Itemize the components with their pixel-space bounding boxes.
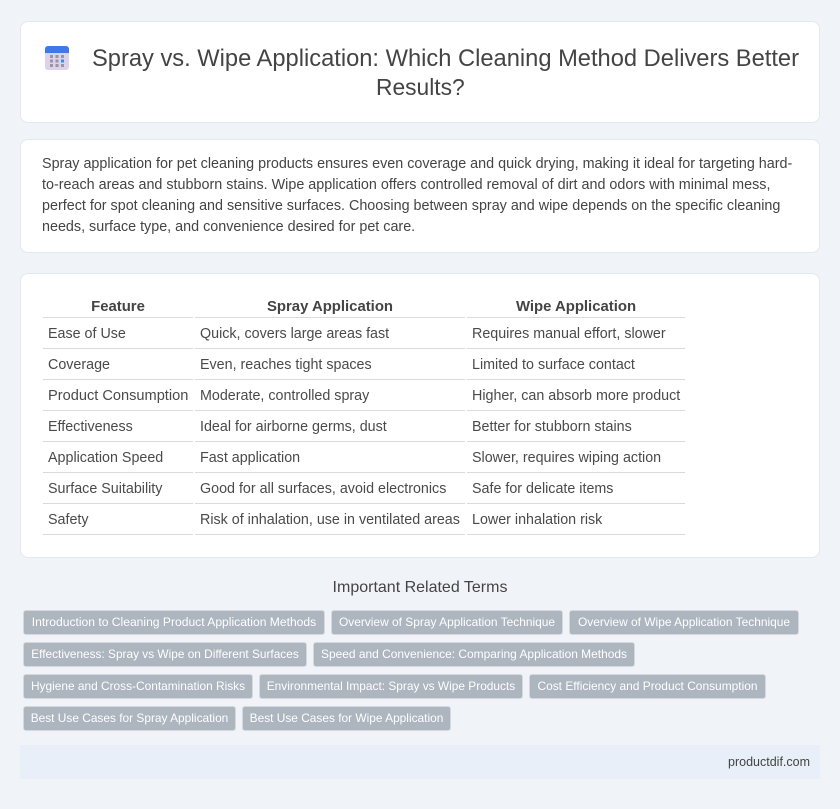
row: ease of use bbox=[48, 326, 666, 342]
row: application speed: Slower, requires wiping action bbox=[472, 450, 661, 466]
row: effectiveness bbox=[48, 419, 632, 435]
tag bbox=[259, 674, 523, 699]
footer text: productdif.com bbox=[728, 755, 810, 769]
row: coverage bbox=[48, 357, 635, 373]
row: coverage: Limited to surface contact bbox=[472, 357, 635, 373]
tag bbox=[23, 642, 307, 667]
row: safety: Safety bbox=[48, 512, 89, 528]
row: safety: Risk of inhalation, use in ventilated areas bbox=[200, 512, 460, 528]
row: surface suitability bbox=[48, 481, 613, 497]
tag: Overview of Wipe Application Technique bbox=[578, 615, 790, 629]
footer bar bbox=[20, 745, 820, 779]
panel: intro card bbox=[20, 139, 820, 253]
tag: Speed and Convenience: Comparing Application Methods bbox=[321, 647, 627, 661]
row: coverage: Even, reaches tight spaces bbox=[200, 357, 372, 373]
row: ease of use: Ease of Use bbox=[48, 326, 126, 342]
row: ease of use: Quick, covers large areas fast bbox=[200, 326, 389, 342]
row: effectiveness: Ideal for airborne germs, dust bbox=[200, 419, 387, 435]
tag: Overview of Spray Application Technique bbox=[339, 615, 555, 629]
text block: intro: perfect for spot cleaning and sensitive surfaces. Choosing between spray and wipe depends on the specific cleaning bbox=[42, 198, 780, 214]
row: product consumption: Product Consumption bbox=[48, 388, 188, 404]
heading: related terms: Important Related Terms bbox=[333, 579, 507, 596]
row: surface suitability: Safe for delicate items bbox=[472, 481, 613, 497]
row: application speed: Application Speed bbox=[48, 450, 163, 466]
tag: Best Use Cases for Spray Application bbox=[31, 711, 228, 725]
row: effectiveness: Better for stubborn stains bbox=[472, 419, 632, 435]
row: application speed bbox=[48, 450, 661, 466]
column headers: Feature bbox=[91, 299, 145, 315]
heading: line 1: Spray vs. Wipe Application: Which Cleaning Method Delivers Better bbox=[92, 46, 799, 72]
tag: Hygiene and Cross-Contamination Risks bbox=[31, 679, 245, 693]
row: product consumption bbox=[48, 388, 680, 404]
row: safety bbox=[48, 512, 602, 528]
column headers bbox=[91, 299, 636, 315]
row: product consumption: Higher, can absorb more product bbox=[472, 388, 680, 404]
row: safety: Lower inhalation risk bbox=[472, 512, 602, 528]
tag bbox=[569, 610, 799, 635]
row: application speed: Fast application bbox=[200, 450, 300, 466]
tag bbox=[331, 610, 563, 635]
panel: comparison table card bbox=[20, 273, 820, 558]
tag bbox=[529, 674, 766, 699]
tag: Environmental Impact: Spray vs Wipe Products bbox=[267, 679, 515, 693]
icon: calendar bbox=[45, 46, 69, 70]
tag bbox=[23, 674, 253, 699]
text block: intro: needs, surface type, and convenience desired for pet care. bbox=[42, 219, 415, 235]
row: surface suitability: Surface Suitability bbox=[48, 481, 162, 497]
row: effectiveness: Effectiveness bbox=[48, 419, 133, 435]
tag bbox=[313, 642, 635, 667]
tags: related terms bbox=[23, 610, 799, 731]
tag: Cost Efficiency and Product Consumption bbox=[537, 679, 758, 693]
tag: Introduction to Cleaning Product Application Methods bbox=[32, 615, 316, 629]
text block: intro: Spray application for pet cleaning products ensures even coverage and quick drying, making it ideal for targeting hard- bbox=[42, 156, 792, 172]
text block: intro bbox=[42, 156, 792, 235]
tag bbox=[23, 706, 236, 731]
table: comparison bbox=[43, 299, 685, 535]
tag: Effectiveness: Spray vs Wipe on Different Surfaces bbox=[31, 647, 299, 661]
row: surface suitability: Good for all surfaces, avoid electronics bbox=[200, 481, 446, 497]
text block: intro: to-reach areas and stubborn stains. Wipe application offers controlled removal of dirt and odors with minimal mess, bbox=[42, 177, 770, 193]
column headers: Spray Application bbox=[267, 299, 393, 315]
row: ease of use: Requires manual effort, slower bbox=[472, 326, 666, 342]
column headers: Wipe Application bbox=[516, 299, 636, 315]
tag: Best Use Cases for Wipe Application bbox=[250, 711, 443, 725]
panel: title card bbox=[20, 21, 820, 123]
tag bbox=[242, 706, 451, 731]
tag bbox=[23, 610, 325, 635]
heading: line 2: Results? bbox=[376, 74, 465, 100]
row: product consumption: Moderate, controlled spray bbox=[200, 388, 369, 404]
row: coverage: Coverage bbox=[48, 357, 110, 373]
